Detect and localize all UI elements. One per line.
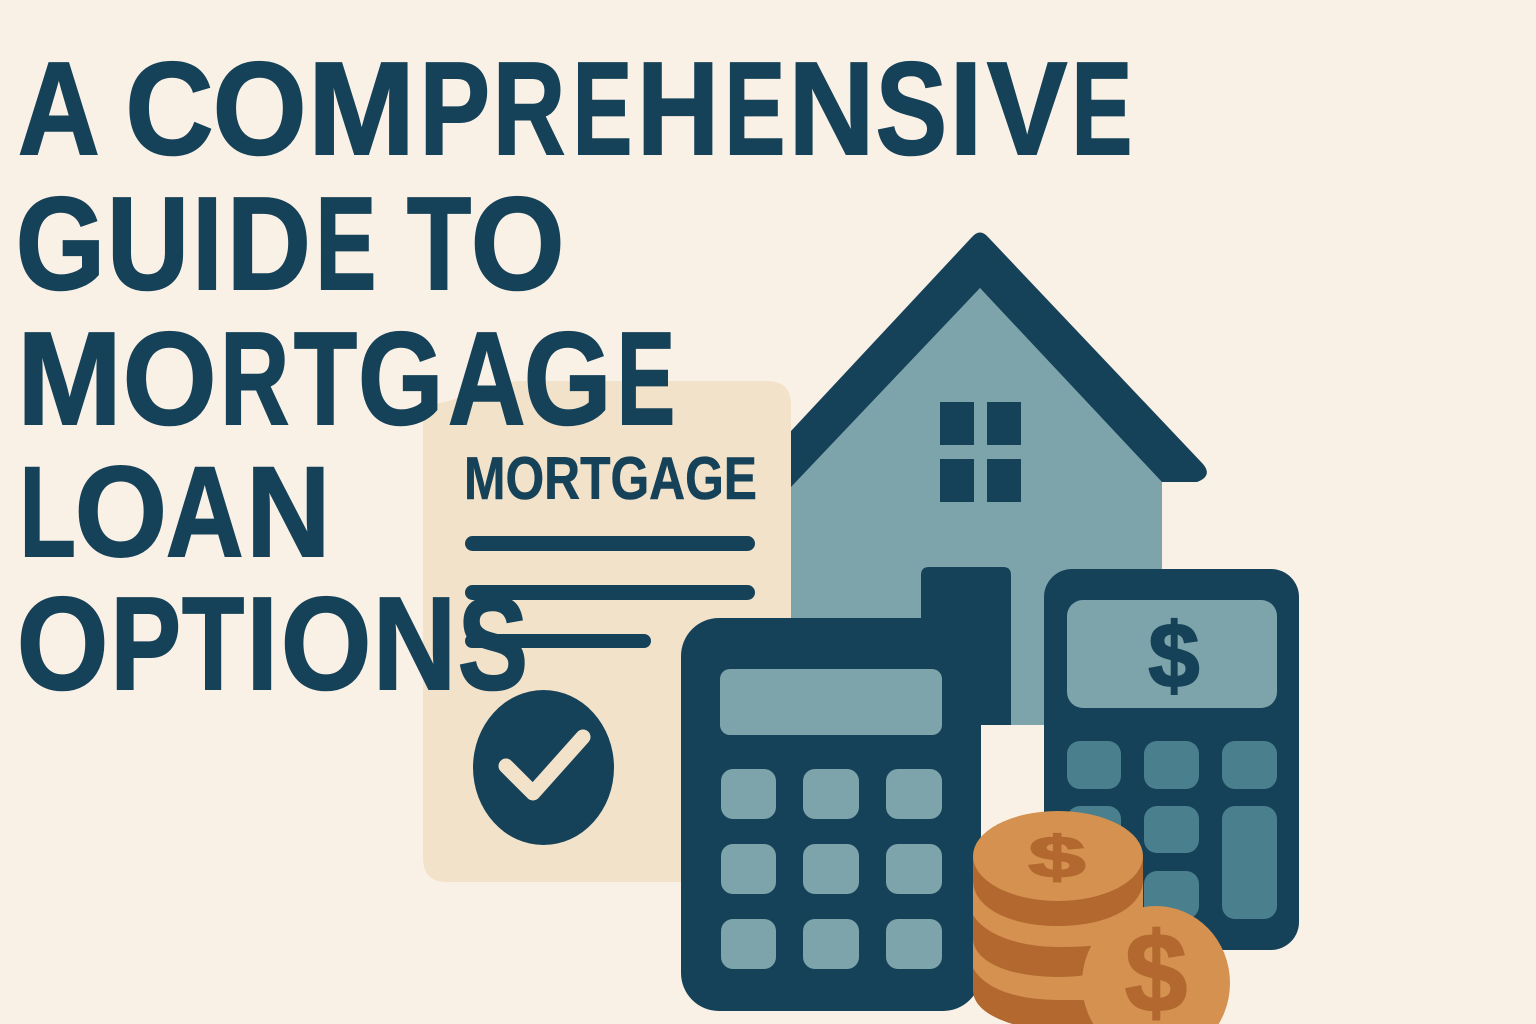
icon: approval check [473,690,614,845]
title: N [373,570,456,717]
title: O [17,570,108,717]
icon: rear calculator [1044,569,1299,950]
title: O [213,35,307,182]
title: E [724,35,785,182]
title: T [182,570,244,717]
document heading: MORTGAGE [464,445,757,512]
title: C [125,35,214,182]
title: V [987,35,1067,182]
title: R [220,305,289,452]
title: U [107,170,189,317]
icon: mortgage document [423,381,791,882]
title: L [20,441,76,584]
title: G [358,305,443,452]
title: O [281,570,371,717]
title: O [75,441,167,584]
title: G [524,305,612,452]
title: S [458,570,528,717]
title: M [308,35,415,182]
title: R [493,35,565,182]
icon: coin stack [973,811,1143,1024]
icon: single coin [1082,906,1230,1024]
title: E [617,305,675,452]
title: T [294,305,357,452]
coin dollar sign: $ [1029,825,1085,890]
title: I [192,170,223,317]
title: S [876,35,947,182]
title: O [123,305,217,452]
title: I [246,570,278,717]
title: T [407,170,471,317]
calculator screen [720,669,942,735]
title: I [950,35,982,182]
calculator screen with dollar sign: $ [1148,605,1200,707]
calculator buttons [721,769,942,969]
title: H [637,35,719,182]
title: D [227,170,311,317]
title: A [18,35,97,182]
icon: house [791,232,1207,725]
calculator buttons [1067,741,1277,919]
document text lines [465,536,755,648]
title: E [573,35,632,182]
title: N [246,441,330,584]
title: A [448,305,525,452]
title: G [16,170,105,317]
title [16,35,1132,717]
title: A [166,441,243,584]
title: E [316,170,376,317]
title: N [788,35,874,182]
icon: front calculator [681,618,981,1011]
title: M [17,305,122,452]
title: O [471,170,565,317]
title: P [110,570,181,717]
title: P [420,35,490,182]
house door [921,567,1011,725]
calculator screen with dollar sign [1067,600,1277,708]
gap below house [981,725,1045,845]
title: E [1072,35,1132,182]
house window [940,402,1021,502]
